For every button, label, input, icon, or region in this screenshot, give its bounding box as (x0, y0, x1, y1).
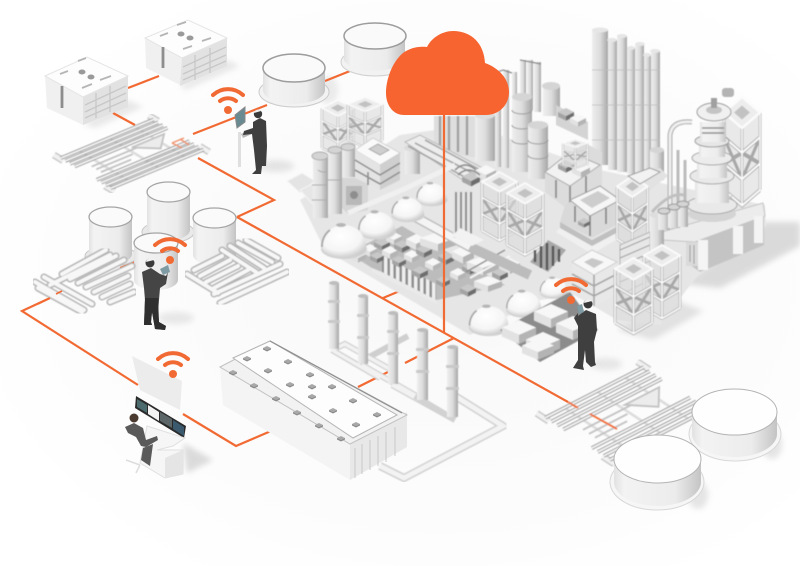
tank farm with pipe racks (35, 182, 287, 312)
desk (140, 426, 185, 478)
icon: wifi tanks (155, 239, 185, 264)
spherical storage domes upper (321, 182, 448, 259)
front tank (134, 233, 178, 290)
stack array with pipe base (328, 281, 503, 478)
person with tablet at plant (573, 299, 597, 370)
stacks (328, 281, 459, 417)
tank front (610, 435, 704, 510)
person with kiosk (235, 107, 267, 174)
building 1 (45, 57, 128, 125)
icon: wifi top (213, 89, 243, 114)
monitor wall (135, 396, 186, 438)
overhead panel (132, 356, 182, 410)
tank far right (341, 23, 409, 76)
storage box buildings (45, 20, 227, 125)
right reactor tower (650, 88, 765, 272)
walkway pipe band (397, 207, 530, 275)
base pipes (332, 336, 503, 478)
thin vertical process pipes (495, 60, 541, 168)
back tanks (85, 182, 236, 266)
plant base (300, 125, 766, 335)
tank left (259, 54, 329, 107)
scaffold behind reactor (724, 97, 760, 206)
pipe rack left (35, 250, 134, 312)
orange network connection lines (22, 71, 568, 446)
left scaffold units and process block (287, 97, 400, 218)
spherical storage domes lower (469, 277, 568, 336)
roof vents (229, 346, 381, 442)
upper storage tanks (259, 23, 409, 107)
vertical cloud uplink line (443, 112, 445, 332)
orange highlight in rack (568, 402, 617, 429)
pipe platform behind cloud line (404, 116, 496, 186)
icon: orange cloud (386, 31, 509, 115)
person with tablet at tanks (142, 258, 170, 330)
pipe rack top left (54, 116, 209, 191)
orange tank link over rack (38, 291, 62, 304)
tall stack cluster (592, 28, 660, 174)
tank right (689, 389, 781, 461)
scaffold towers centre (482, 172, 566, 272)
kiosk (235, 107, 254, 167)
mid process platforms (545, 139, 668, 295)
seated operator (125, 414, 158, 473)
large flat-roof building (220, 341, 407, 480)
front block and scaffold towers (572, 245, 680, 334)
icon: wifi console (158, 353, 188, 378)
icon: wifi plant (556, 279, 586, 304)
ground shadows (83, 60, 800, 509)
large storage tanks (610, 389, 781, 510)
building 2 (145, 20, 227, 86)
pipe rack right (187, 240, 287, 303)
dense process machinery (348, 165, 530, 304)
control room console (125, 356, 186, 478)
concrete crate slabs (500, 292, 598, 362)
main refinery plant (287, 28, 766, 362)
central drums and columns (475, 82, 664, 180)
pipe rack lower right (537, 362, 715, 464)
